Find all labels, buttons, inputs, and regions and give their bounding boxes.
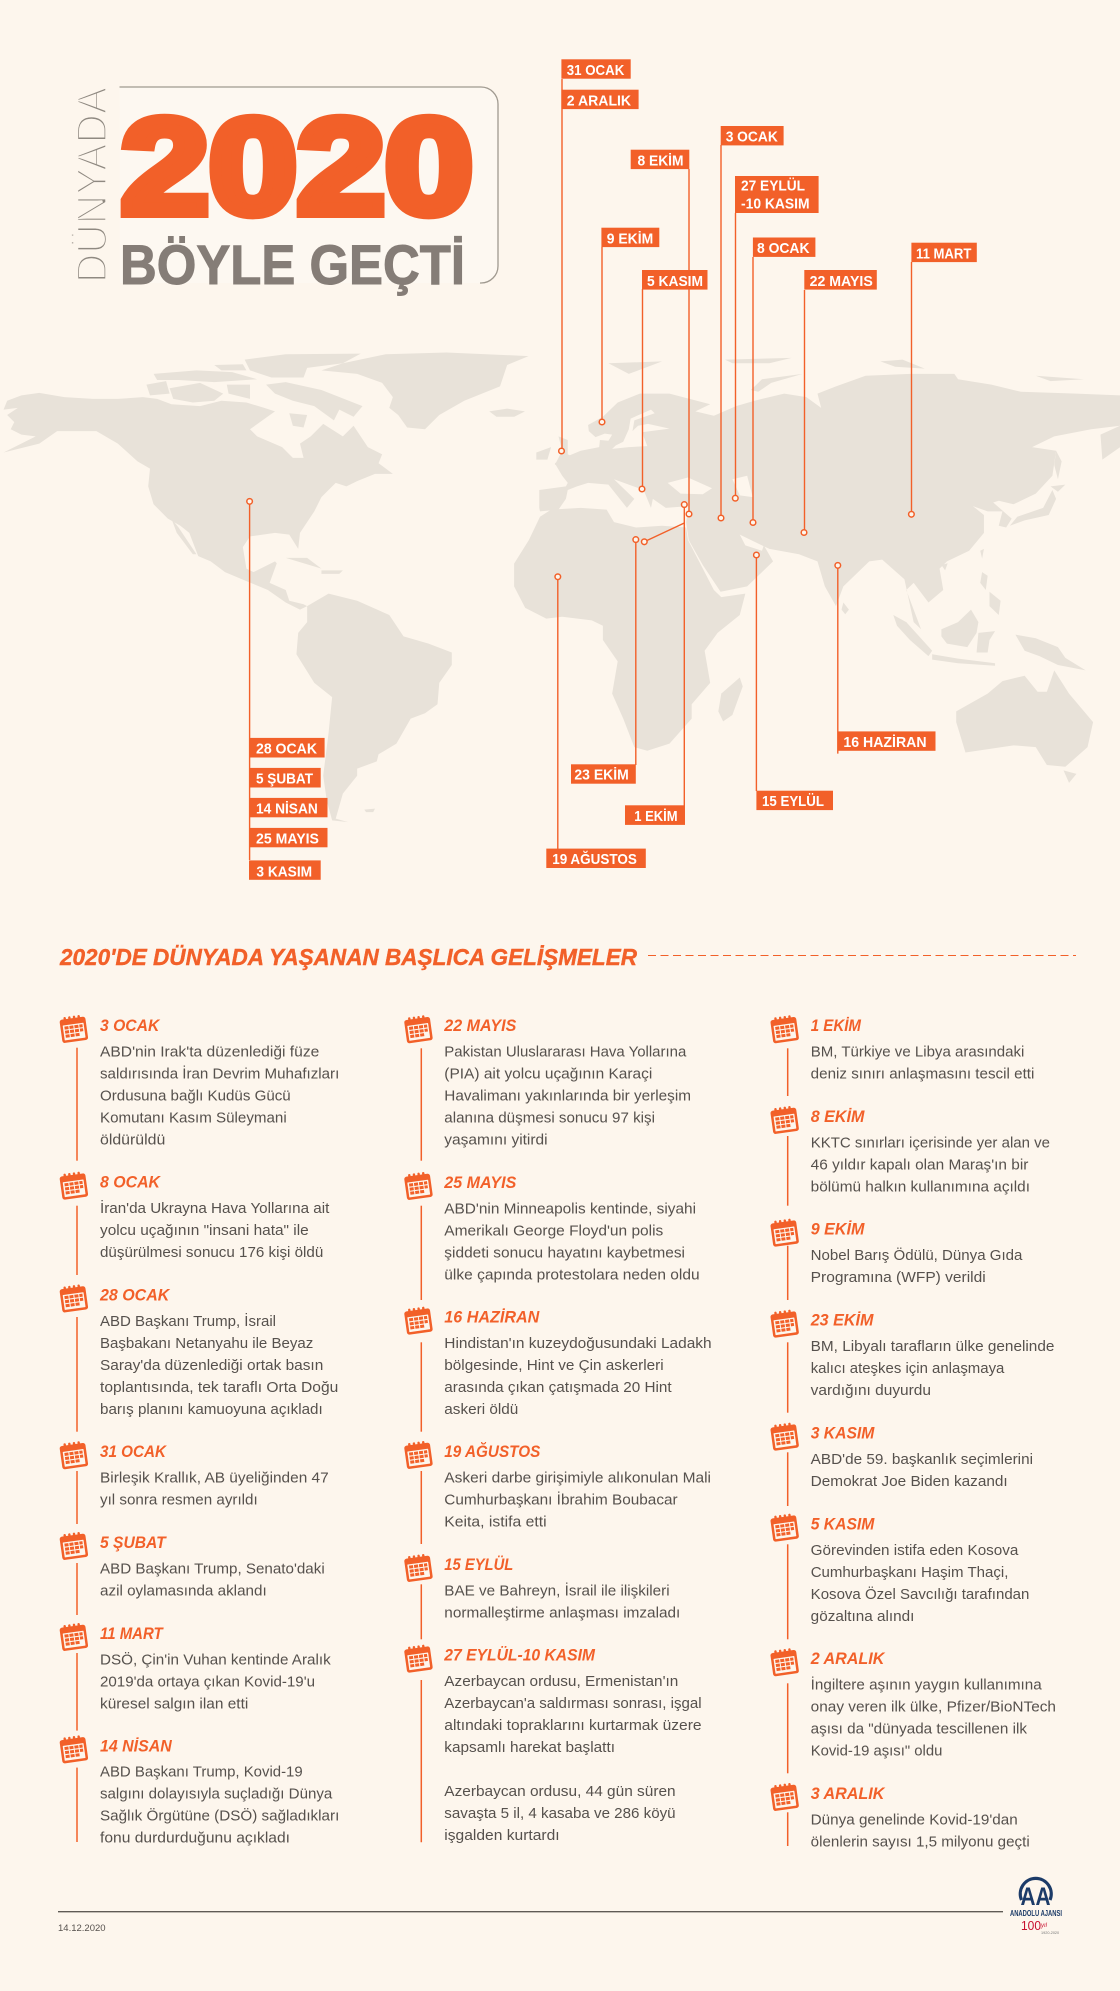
logo: Anadolu Ajansı 100. yıl: 1920-2020 <box>1041 1931 1059 1935</box>
event: 16 HAZİRAN <box>404 1306 712 1432</box>
event: 3 OCAK <box>59 1014 339 1161</box>
event: 23 EKİM: vardığını duyurdu <box>811 1382 931 1399</box>
tag: 23 EKİM: 23 EKİM <box>574 767 629 784</box>
event: 8 EKİM <box>770 1105 1050 1206</box>
event: 27 EYLÜL-10 KASIM: Azerbaycan ordusu, 44 gün süren <box>444 1783 676 1800</box>
tag: 1 EKİM: 1 EKİM <box>634 808 678 825</box>
event: 19 AĞUSTOS: Askeri darbe girişimiyle alıkonulan Mali <box>444 1469 711 1486</box>
event: 3 OCAK: 3 OCAK <box>100 1017 160 1035</box>
event: 3 KASIM <box>770 1422 1033 1506</box>
tag: 19 AĞUSTOS: 19 AĞUSTOS <box>552 850 637 868</box>
event: 8 OCAK: yolcu uçağının "insani hata" ile <box>100 1222 309 1239</box>
tag: 3 OCAK: 3 OCAK <box>726 129 778 146</box>
event: 27 EYLÜL-10 KASIM: Azerbaycan'a saldırması sonrası, işgal <box>444 1695 702 1712</box>
event: 23 EKİM <box>770 1309 1054 1413</box>
tag: 8 OCAK: 8 OCAK <box>757 240 810 257</box>
tag: 27 EYLÜL -10 KASIM: 27 EYLÜL <box>741 178 805 195</box>
tag: 27 EYLÜL -10 KASIM <box>735 176 819 213</box>
event: 25 MAYIS: ABD'nin Minneapolis kentinde, siyahi <box>444 1200 696 1217</box>
event: 22 MAYIS: 22 MAYIS <box>443 1017 516 1035</box>
event: 28 OCAK <box>59 1284 338 1432</box>
event: 5 ŞUBAT: ABD Başkanı Trump, Senato'daki <box>100 1560 325 1577</box>
event: 28 OCAK: Başbakanı Netanyahu ile Beyaz <box>100 1335 313 1352</box>
event: 8 OCAK: İran'da Ukrayna Hava Yollarına ait <box>100 1199 330 1217</box>
event: 2 ARALIK: İngiltere aşının yaygın kullanımına <box>811 1676 1042 1694</box>
event: 1 EKİM: 1 EKİM <box>811 1017 862 1035</box>
logo: Anadolu Ajansı 100. yıl <box>1010 1878 1062 1935</box>
event: 11 MART: DSÖ, Çin'in Vuhan kentinde Aralık <box>100 1650 331 1668</box>
event: 25 MAYIS: 25 MAYIS <box>443 1174 516 1192</box>
logo: Anadolu Ajansı 100. yıl: AA <box>1020 1883 1050 1911</box>
event: 15 EYLÜL: normalleştirme anlaşması imzaladı <box>444 1604 680 1621</box>
event: 22 MAYIS <box>404 1014 691 1161</box>
tag: 25 MAYIS: 25 MAYIS <box>256 831 319 848</box>
event: 11 MART: küresel salgın ilan etti <box>100 1695 248 1712</box>
event: 23 EKİM: kalıcı ateşkes için anlaşmaya <box>811 1360 1005 1377</box>
event: 14 NİSAN: Sağlık Örgütüne (DSÖ) sağladıkları <box>100 1807 339 1825</box>
event: 31 OCAK: yıl sonra resmen ayrıldı <box>100 1492 258 1509</box>
event: 28 OCAK: barış planını kamuoyuna açıkladı <box>100 1401 323 1418</box>
event: 15 EYLÜL: BAE ve Bahreyn, İsrail ile ilişkileri <box>444 1581 670 1599</box>
tag: 11 MART: 11 MART <box>916 245 971 262</box>
panel: events column 3 <box>770 1014 1056 1850</box>
event: 22 MAYIS: Pakistan Uluslararası Hava Yollarına <box>444 1044 687 1061</box>
event: 3 ARALIK <box>770 1782 1030 1850</box>
event: 31 OCAK <box>59 1440 329 1524</box>
event: 14 NİSAN: 14 NİSAN <box>100 1737 173 1755</box>
event: 8 EKİM: 46 yıldır kapalı olan Maraş'ın bir <box>811 1156 1028 1173</box>
event: 5 ŞUBAT: 5 ŞUBAT <box>100 1534 168 1552</box>
event: 28 OCAK: toplantısında, tek taraflı Orta Doğu <box>100 1379 338 1396</box>
section heading: 2020'DE DÜNYADA YAŞANAN BAŞLICA GELİŞMELER <box>59 944 637 970</box>
event: 28 OCAK: 28 OCAK <box>99 1286 170 1304</box>
event: 5 KASIM: Görevinden istifa eden Kosova <box>811 1542 1019 1559</box>
event: 11 MART <box>59 1622 331 1731</box>
event: 19 AĞUSTOS: 19 AĞUSTOS <box>444 1442 540 1461</box>
tag: 9 EKİM: 9 EKİM <box>607 230 653 247</box>
event: 5 KASIM: 5 KASIM <box>811 1516 876 1534</box>
event: 15 EYLÜL <box>404 1553 680 1639</box>
tag: 2 ARALIK: 2 ARALIK <box>567 92 631 109</box>
event: 19 AĞUSTOS: Keita, istifa etti <box>444 1513 547 1530</box>
event: 1 EKİM <box>770 1014 1034 1096</box>
tag: 8 EKİM: 8 EKİM <box>638 152 684 169</box>
logo: Anadolu Ajansı 100. yıl: yıl <box>1040 1923 1048 1929</box>
event: 22 MAYIS: alanına düşmesi sonucu 97 kişi <box>444 1110 655 1127</box>
event: 14 NİSAN: fonu durdurduğunu açıkladı <box>100 1830 290 1847</box>
event: 8 EKİM: bölümü halkın kullanımına açıldı <box>811 1178 1030 1195</box>
event: 5 ŞUBAT: azil oylamasında aklandı <box>100 1582 267 1599</box>
event: 3 OCAK: Ordusuna bağlı Kudüs Gücü <box>100 1087 291 1104</box>
event: 1 EKİM: BM, Türkiye ve Libya arasındaki <box>811 1044 1024 1061</box>
event: 2 ARALIK <box>770 1647 1056 1773</box>
event: 16 HAZİRAN: 16 HAZİRAN <box>444 1309 540 1327</box>
event: 16 HAZİRAN: bölgesinde, Hint ve Çin askerleri <box>444 1357 664 1374</box>
event: 3 ARALIK: Dünya genelinde Kovid-19'dan <box>811 1811 1018 1828</box>
event: 25 MAYIS: şiddeti sonucu hayatını kaybetmesi <box>444 1244 685 1261</box>
event: 8 OCAK: düşürülmesi sonucu 176 kişi öldü <box>100 1244 323 1261</box>
event: 16 HAZİRAN: askeri öldü <box>444 1401 518 1418</box>
event: 19 AĞUSTOS <box>404 1440 711 1544</box>
event: 16 HAZİRAN: arasında çıkan çatışmada 20 Hint <box>444 1379 672 1396</box>
logo: Anadolu Ajansı 100. yıl: ANADOLU AJANSI <box>1010 1909 1062 1918</box>
event: 5 KASIM: Cumhurbaşkanı Haşim Thaçi, <box>811 1564 1008 1581</box>
tag: 31 OCAK: 31 OCAK <box>567 62 624 79</box>
event: 3 KASIM: Demokrat Joe Biden kazandı <box>811 1473 1008 1490</box>
title: 2020: 2020 <box>121 91 473 242</box>
tag: 3 KASIM: 3 KASIM <box>256 863 312 880</box>
date tags on the map <box>249 59 977 880</box>
event: 27 EYLÜL-10 KASIM: Azerbaycan ordusu, Ermenistan'ın <box>444 1673 678 1690</box>
event: 8 OCAK: 8 OCAK <box>100 1174 161 1192</box>
event: 1 EKİM: deniz sınırı anlaşmasını tescil etti <box>811 1066 1034 1083</box>
event: 14 NİSAN: ABD Başkanı Trump, Kovid-19 <box>100 1764 303 1781</box>
event: 3 OCAK: Komutanı Kasım Süleymani <box>100 1109 287 1126</box>
event: 8 EKİM: KKTC sınırları içerisinde yer alan ve <box>811 1134 1050 1151</box>
event: 8 OCAK <box>59 1171 330 1275</box>
event: 9 EKİM <box>770 1218 1023 1300</box>
event: 25 MAYIS: ülke çapında protestolara neden oldu <box>444 1266 700 1283</box>
event: 5 ŞUBAT <box>59 1531 325 1615</box>
map connectors and location dots <box>247 79 914 860</box>
event: 27 EYLÜL-10 KASIM <box>404 1644 702 1844</box>
event: 16 HAZİRAN: Hindistan'ın kuzeydoğusundaki Ladakh <box>444 1335 712 1352</box>
event: 2 ARALIK: onay veren ilk ülke, Pfizer/BioNTech <box>811 1699 1056 1716</box>
tag: 5 ŞUBAT: 5 ŞUBAT <box>256 771 313 788</box>
event: 23 EKİM: 23 EKİM <box>810 1312 875 1330</box>
event: 23 EKİM: BM, Libyalı tarafların ülke genelinde <box>811 1338 1054 1355</box>
event: 22 MAYIS: Havalimanı yakınlarında bir yerleşim <box>444 1088 691 1105</box>
event: 28 OCAK: ABD Başkanı Trump, İsrail <box>100 1312 276 1330</box>
event: 14 NİSAN <box>59 1735 339 1847</box>
tag: 28 OCAK: 28 OCAK <box>256 741 317 758</box>
event: 22 MAYIS: (PIA) ait yolcu uçağının Karaçi <box>444 1066 652 1083</box>
event: 27 EYLÜL-10 KASIM: savaşta 5 il, 4 kasaba ve 286 köyü <box>444 1805 676 1822</box>
panel: title block <box>68 87 498 296</box>
event: 15 EYLÜL: 15 EYLÜL <box>444 1555 513 1574</box>
event: 25 MAYIS <box>404 1171 700 1300</box>
event: 3 ARALIK: ölenlerin sayısı 1,5 milyonu geçti <box>811 1833 1030 1850</box>
event: 3 OCAK: ABD'nin Irak'ta düzenlediği füze <box>100 1043 319 1060</box>
tag: 22 MAYIS: 22 MAYIS <box>810 273 873 290</box>
panel: events column 1 <box>59 1014 339 1847</box>
event: 3 OCAK: saldırısında İran Devrim Muhafızları <box>100 1064 339 1082</box>
event: 2 ARALIK: Kovid-19 aşısı" oldu <box>811 1743 942 1760</box>
event: 27 EYLÜL-10 KASIM: 27 EYLÜL-10 KASIM <box>443 1646 596 1665</box>
tag: 16 HAZİRAN: 16 HAZİRAN <box>843 734 927 751</box>
event: 27 EYLÜL-10 KASIM: kapsamlı harekat başlattı <box>444 1739 615 1756</box>
event: 28 OCAK: Saray'da düzenlediği ortak basın <box>100 1357 323 1374</box>
event: 22 MAYIS: yaşamını yitirdi <box>444 1132 548 1149</box>
tag: 14 NİSAN: 14 NİSAN <box>256 801 318 818</box>
event: 14 NİSAN: salgını dolayısıyla suçladığı Dünya <box>100 1786 333 1803</box>
event: 3 OCAK: öldürüldü <box>100 1131 165 1148</box>
event: 31 OCAK: Birleşik Krallık, AB üyeliğinden 47 <box>100 1470 329 1487</box>
tag: 5 KASIM: 5 KASIM <box>647 273 703 290</box>
title: BÖYLE GEÇTİ: BÖYLE GEÇTİ <box>120 233 465 296</box>
tag: 15 EYLÜL: 15 EYLÜL <box>762 793 824 810</box>
event: 2 ARALIK: aşısı da "dünyada tescillenen ilk <box>811 1721 1028 1738</box>
event: 8 EKİM: 8 EKİM <box>811 1108 866 1126</box>
event: 11 MART: 11 MART <box>100 1625 164 1643</box>
event: 5 KASIM: Kosova Özel Savcılığı tarafından <box>811 1585 1029 1603</box>
event: 27 EYLÜL-10 KASIM: işgalden kurtardı <box>444 1827 560 1844</box>
panel: events column 2 <box>404 1014 712 1844</box>
event: 11 MART: 2019'da ortaya çıkan Kovid-19'u <box>100 1673 315 1690</box>
event: 9 EKİM: Programına (WFP) verildi <box>811 1269 986 1286</box>
event: 3 KASIM: ABD'de 59. başkanlık seçimlerini <box>811 1451 1033 1468</box>
logo: Anadolu Ajansı 100. yıl: 100 <box>1021 1918 1041 1933</box>
tag: 27 EYLÜL -10 KASIM: -10 KASIM <box>741 195 810 212</box>
event: 3 KASIM: 3 KASIM <box>811 1425 876 1443</box>
event: 5 KASIM <box>770 1513 1029 1639</box>
footer rule and date: 14.12.2020 <box>58 1923 106 1934</box>
event: 31 OCAK: 31 OCAK <box>100 1443 167 1461</box>
title: DÜNYADA: DÜNYADA <box>68 87 116 283</box>
event: 2 ARALIK: 2 ARALIK <box>810 1650 885 1668</box>
event: 3 ARALIK: 3 ARALIK <box>811 1785 885 1803</box>
world map <box>4 352 1120 822</box>
event: 9 EKİM: 9 EKİM <box>811 1221 866 1239</box>
event: 9 EKİM: Nobel Barış Ödülü, Dünya Gıda <box>811 1246 1023 1264</box>
event: 19 AĞUSTOS: Cumhurbaşkanı İbrahim Boubacar <box>444 1490 678 1508</box>
event: 25 MAYIS: Amerikalı George Floyd'un polis <box>444 1222 663 1239</box>
event: 5 KASIM: gözaltına alındı <box>811 1608 914 1625</box>
event: 27 EYLÜL-10 KASIM: altındaki topraklarını kurtarmak üzere <box>444 1717 702 1734</box>
